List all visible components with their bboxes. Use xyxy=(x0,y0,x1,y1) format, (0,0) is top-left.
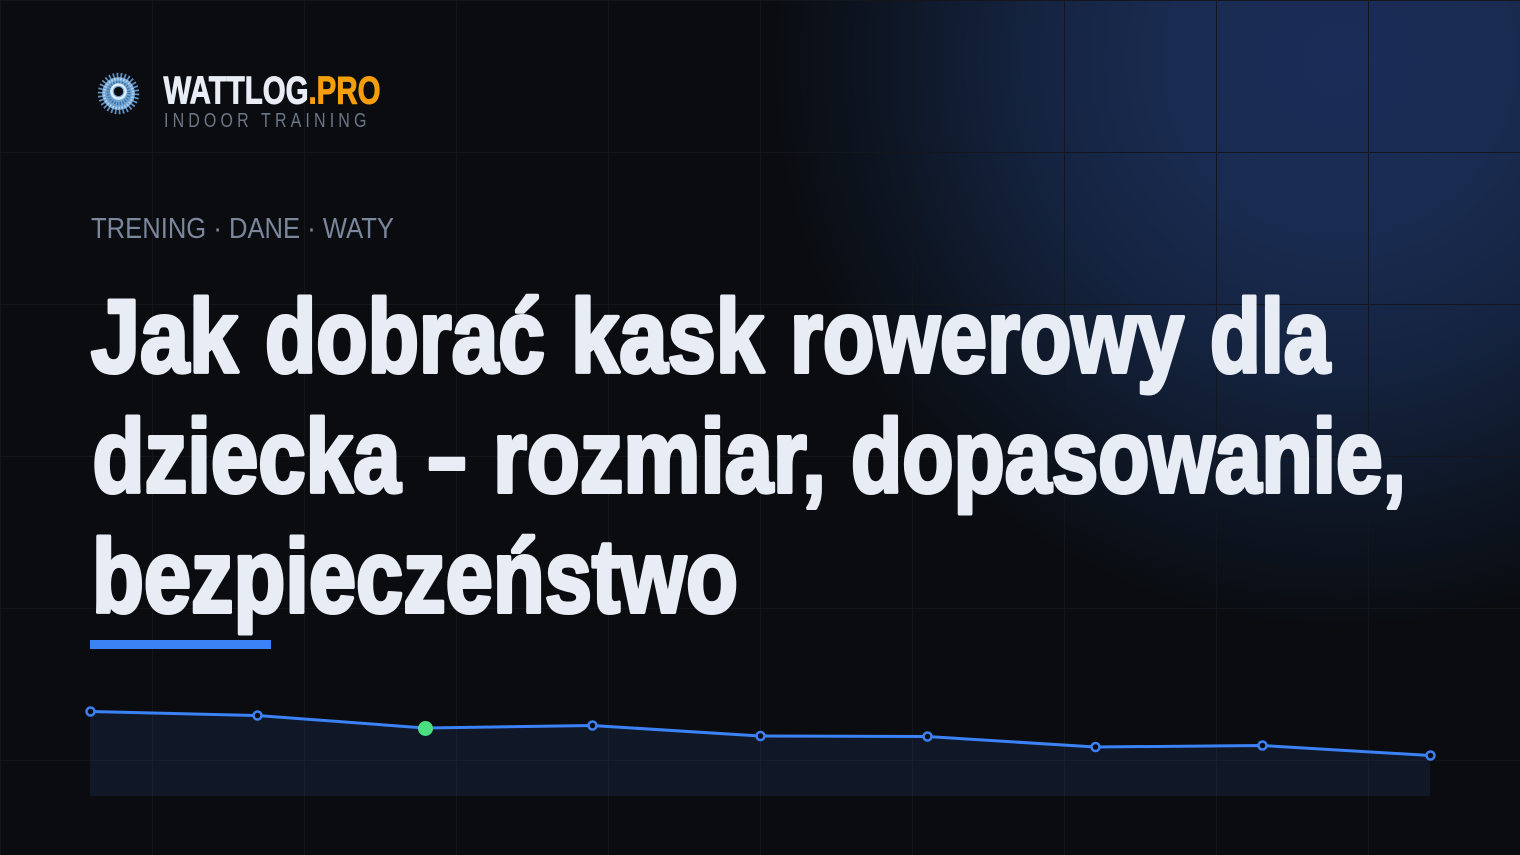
icon: cassette gear logo xyxy=(100,75,137,112)
title: Jak xyxy=(91,279,238,395)
title: dla xyxy=(1210,279,1331,395)
brand tagline: INDOOR TRAINING xyxy=(164,109,366,131)
highlighted data point xyxy=(418,721,433,736)
title: rowerowy xyxy=(790,279,1184,395)
title accent underline xyxy=(90,640,271,649)
title: dopasowanie, xyxy=(851,399,1406,515)
brand name: WATTLOG.PRO xyxy=(164,70,380,112)
title: bezpieczeństwo xyxy=(92,519,738,635)
title: dziecka xyxy=(92,399,401,515)
chart line xyxy=(90,712,1430,756)
title: rozmiar, xyxy=(493,399,826,515)
title: – xyxy=(428,399,466,515)
chart data points xyxy=(86,708,1434,760)
eyebrow text: TRENING · DANE · WATY xyxy=(91,213,394,245)
title: kask xyxy=(571,279,764,395)
chart area fill xyxy=(90,712,1430,796)
title: dobrać xyxy=(265,279,545,395)
line chart: power trend xyxy=(86,708,1434,796)
